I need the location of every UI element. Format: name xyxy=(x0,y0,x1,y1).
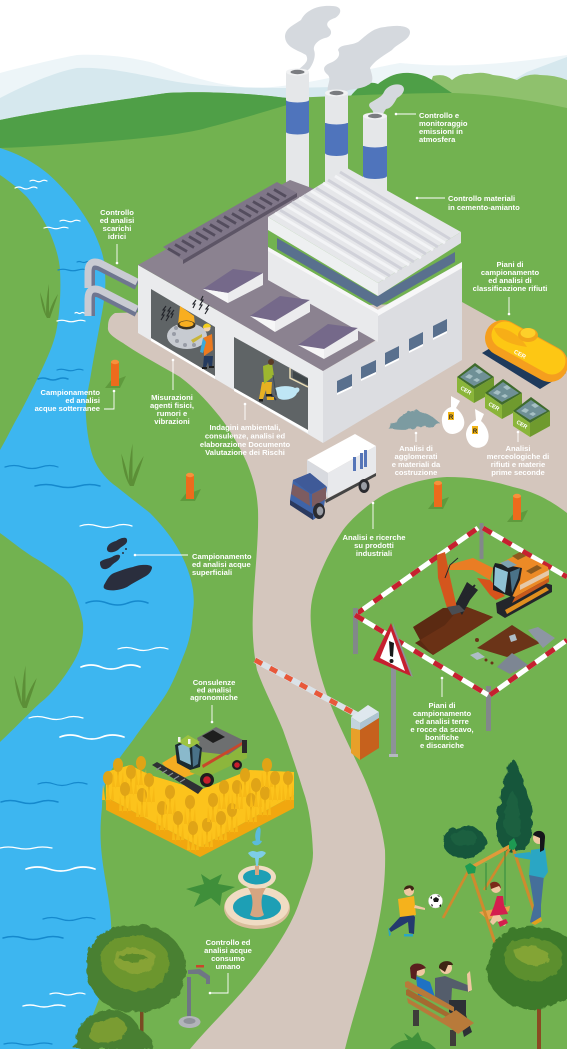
excavator xyxy=(437,552,552,618)
room openings xyxy=(151,338,215,379)
tree at the bottom right xyxy=(487,927,567,1049)
label: acque superficiali: superficiali xyxy=(192,568,232,577)
side windows xyxy=(337,319,447,395)
wheat ears xyxy=(102,756,294,852)
soil heap and rocks xyxy=(470,625,555,674)
near fence xyxy=(486,686,491,731)
trees at the bottom left xyxy=(74,925,187,1049)
label: analisi agglomerati: Analisi di xyxy=(399,444,433,453)
label: acque consumo umano: consumo xyxy=(211,954,245,963)
label: analisi agglomerati xyxy=(392,432,441,477)
label: controllo e monitoraggio emissioni: atmosfera xyxy=(419,135,456,144)
label: indagini ambientali: Indagini ambientali, xyxy=(210,423,280,432)
road barrier xyxy=(255,660,379,760)
label: controllo e monitoraggio emissioni: Controllo e xyxy=(419,111,459,120)
label: indagini ambientali xyxy=(200,403,291,457)
label: misurazioni agenti fisici xyxy=(150,359,194,426)
label: analisi prodotti industriali xyxy=(343,502,405,558)
waste tank: CER xyxy=(512,349,527,361)
label: piani classificazione rifiuti xyxy=(473,260,547,315)
label: analisi agglomerati: agglomerati xyxy=(394,452,438,461)
label: terre e rocce da scavo: e discariche xyxy=(420,741,464,750)
label: acque consumo umano xyxy=(204,938,252,994)
label: consulenze agronomiche xyxy=(190,678,238,723)
label: terre e rocce da scavo: Piani di xyxy=(428,701,456,710)
swing set and girl xyxy=(443,838,538,943)
far fence xyxy=(480,523,484,559)
label: indagini ambientali: Valutazione dei Rischi xyxy=(205,448,285,457)
label: terre e rocce da scavo: campionamento xyxy=(413,709,471,718)
low building walls xyxy=(138,265,323,443)
worker with mop xyxy=(259,359,276,402)
label: misurazioni agenti fisici: vibrazioni xyxy=(154,417,190,426)
label: misurazioni agenti fisici: agenti fisici, xyxy=(150,401,194,410)
label: indagini ambientali: elaborazione Documento xyxy=(200,440,291,449)
label: acque consumo umano: analisi acque xyxy=(204,946,252,955)
label: acque sotterranee xyxy=(35,388,115,413)
excavation pit xyxy=(413,607,493,655)
label: controllo materiali: Controllo materiali xyxy=(448,194,515,203)
label: analisi merceologiche: prime seconde xyxy=(491,468,545,477)
label: analisi prodotti industriali: Analisi e ricerche xyxy=(343,533,405,542)
water tap xyxy=(178,965,210,1028)
grass tufts xyxy=(14,284,144,708)
label: acque sotterranee: ed analisi xyxy=(65,396,100,405)
river xyxy=(0,148,194,1049)
label: acque sotterranee: acque sotterranee xyxy=(35,404,100,413)
warning sign xyxy=(373,623,413,757)
discharge pipes xyxy=(88,262,137,316)
label: consulenze agronomiche: Consulenze xyxy=(193,678,235,687)
wheat field xyxy=(102,727,294,857)
combine harvester xyxy=(152,727,247,794)
label: controllo scarichi idrici: ed analisi xyxy=(100,216,134,225)
label: acque superficiali: ed analisi acque xyxy=(192,560,251,569)
label: terre e rocce da scavo: bonifiche xyxy=(425,733,459,742)
label: analisi merceologiche: Analisi xyxy=(506,444,530,453)
label: analisi merceologiche xyxy=(487,431,549,477)
inspection room xyxy=(259,359,308,402)
boy with ball xyxy=(388,885,442,936)
worker with helmet xyxy=(200,323,214,369)
label: controllo materiali xyxy=(416,194,520,212)
waste sacks: R xyxy=(449,415,454,421)
label: analisi prodotti industriali: industriali xyxy=(356,549,392,558)
label: consulenze agronomiche: agronomiche xyxy=(190,693,238,702)
label: terre e rocce da scavo: ed analisi terre xyxy=(415,717,469,726)
people on the bench xyxy=(405,961,474,1046)
smoke plumes xyxy=(285,6,410,118)
label: acque consumo umano: umano xyxy=(216,962,241,971)
excavation site xyxy=(353,523,567,731)
woman pushing swing xyxy=(514,831,548,925)
label: analisi merceologiche: rifiuti e materie xyxy=(491,460,545,469)
ornamental plant xyxy=(186,874,235,907)
fountain xyxy=(224,827,290,929)
label: controllo e monitoraggio emissioni xyxy=(395,111,468,144)
plant at the bottom xyxy=(390,1032,436,1049)
label: piani classificazione rifiuti: Piani di xyxy=(496,260,524,269)
roof vent grid xyxy=(163,182,297,264)
label: piani classificazione rifiuti: campionamento xyxy=(481,268,539,277)
label: misurazioni agenti fisici: rumori e xyxy=(157,409,187,418)
rubble pile xyxy=(387,411,440,429)
label: consulenze agronomiche: ed analisi xyxy=(197,686,231,694)
label: controllo e monitoraggio emissioni: emissioni in xyxy=(419,127,463,136)
label: acque sotterranee: Campionamento xyxy=(40,388,100,397)
label: controllo scarichi idrici: scarichi xyxy=(103,224,131,233)
purple roof xyxy=(138,180,378,371)
label: terre e rocce da scavo xyxy=(410,677,474,750)
oil spill xyxy=(100,538,152,590)
label: analisi agglomerati: e materiali da xyxy=(392,460,441,469)
main block wall xyxy=(268,247,378,342)
stake markers xyxy=(105,360,528,522)
girl xyxy=(490,882,508,927)
label: misurazioni agenti fisici: Misurazioni xyxy=(151,393,193,402)
label: piani classificazione rifiuti: classificazione rifiuti xyxy=(473,284,547,293)
waste tank xyxy=(482,328,566,389)
label: controllo e monitoraggio emissioni: monitoraggio xyxy=(419,119,468,128)
label: controllo materiali: in cemento-amianto xyxy=(448,203,520,212)
waste sacks: R xyxy=(473,429,478,435)
chimneys with smoke xyxy=(285,6,410,197)
road and factory yard xyxy=(108,302,567,1049)
label: indagini ambientali: consulenze, analisi ed xyxy=(205,432,285,440)
label: analisi prodotti industriali: su prodotti xyxy=(354,541,394,550)
label: controllo scarichi idrici xyxy=(100,208,134,264)
label: piani classificazione rifiuti: ed analisi di xyxy=(488,276,532,285)
waste sacks xyxy=(442,396,489,448)
label: controllo scarichi idrici: Controllo xyxy=(100,208,134,217)
blue band xyxy=(277,238,455,307)
label: analisi merceologiche: merceologiche di xyxy=(487,452,549,461)
CER waste containers xyxy=(457,363,550,437)
noise measurement room xyxy=(161,296,214,369)
label: terre e rocce da scavo: e rocce da scavo, xyxy=(410,725,474,734)
corrugated roof xyxy=(268,168,461,296)
park bushes xyxy=(442,759,533,858)
factory building xyxy=(138,168,462,443)
river waves xyxy=(0,180,168,1045)
label: analisi agglomerati: costruzione xyxy=(395,468,437,477)
label: acque superficiali: Campionamento xyxy=(192,552,252,561)
skylights xyxy=(203,269,358,359)
truck xyxy=(290,434,376,520)
label: controllo scarichi idrici: idrici xyxy=(108,232,126,241)
label: acque superficiali xyxy=(134,552,252,577)
label: acque consumo umano: Controllo ed xyxy=(206,938,251,947)
